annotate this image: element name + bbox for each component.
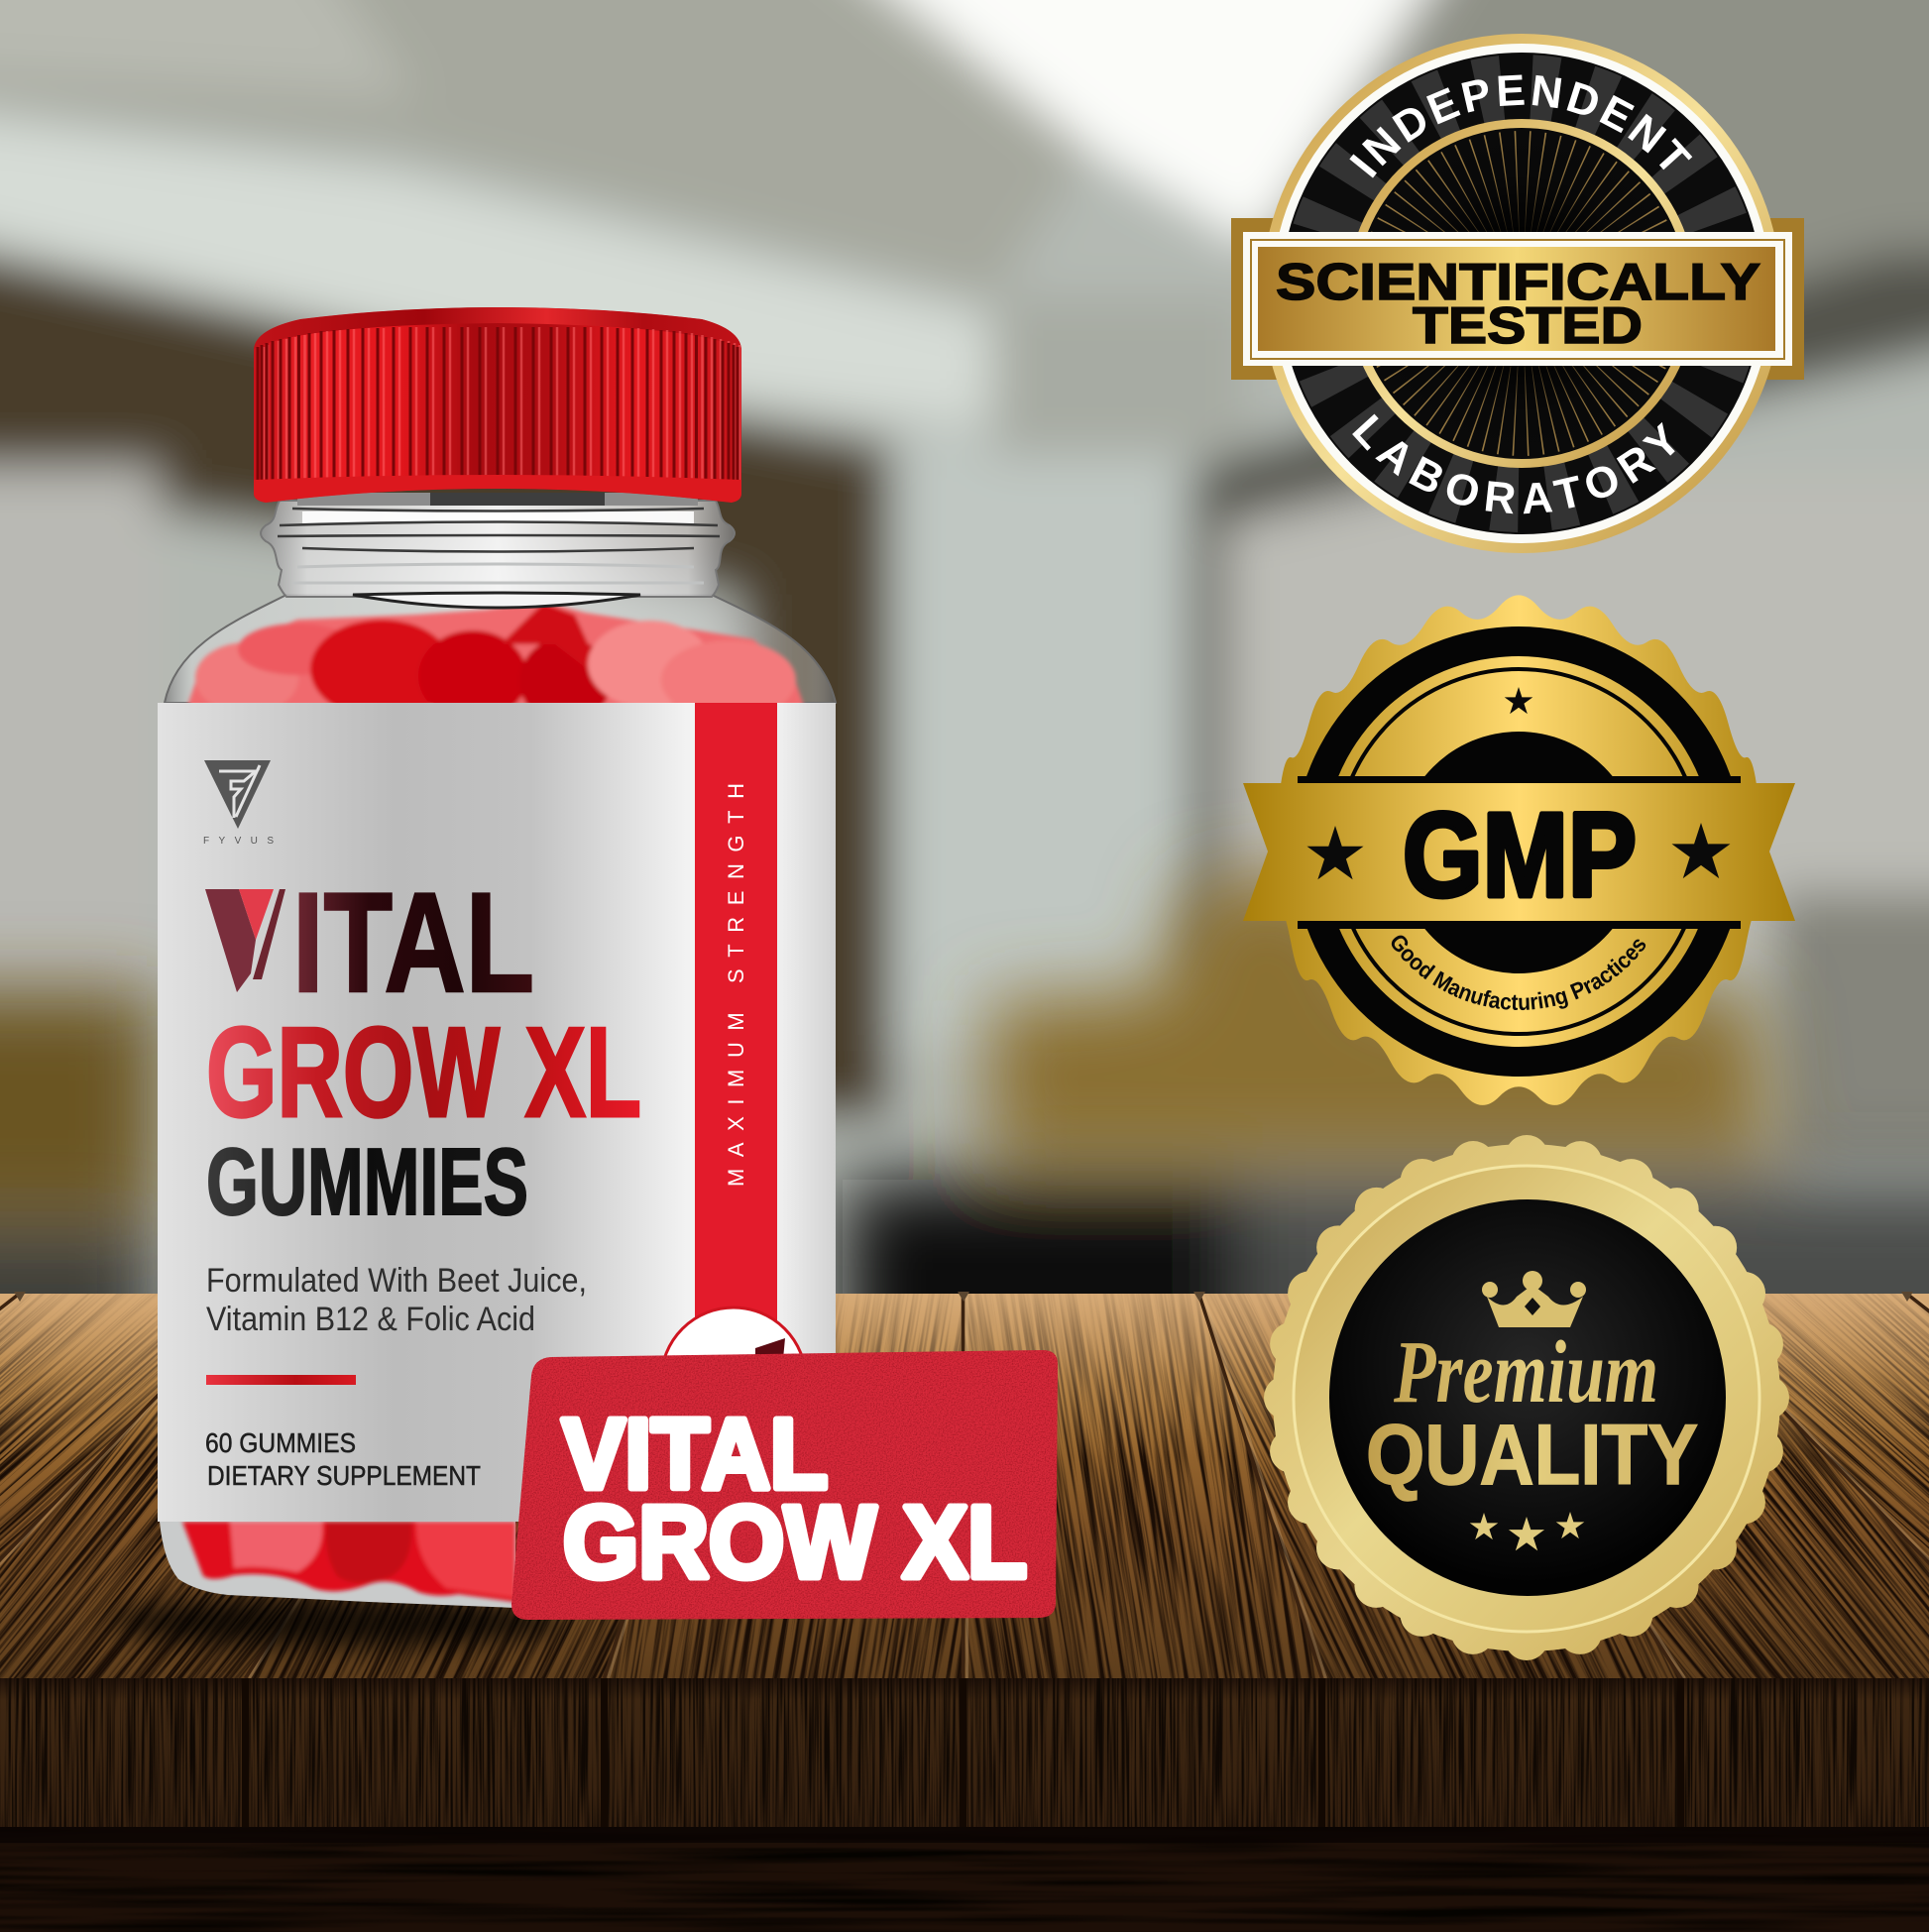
GMP letters: GMP [1403,787,1637,922]
table front edge [0,1678,1929,1827]
segmented ring [1315,87,1728,500]
tested banner [1243,232,1792,366]
product name: V mark [205,889,285,992]
brand logo: FYVUS [203,836,274,847]
red divider [206,1375,356,1385]
round seal partly hidden behind card [661,1307,806,1452]
badge: independent laboratory, scientifically tested [1231,34,1804,553]
brand logo [203,760,274,847]
gummies above label [185,606,806,703]
tested banner: SCIENTIFICALLY [1276,254,1760,311]
red name card [506,1343,1066,1626]
description line 2: Vitamin B12 & Folic Acid [206,1301,535,1338]
star top [1505,687,1532,714]
badge: GMP good manufacturing practices [1243,595,1795,1105]
scalloped seal [1273,595,1764,1105]
badge: premium quality [1273,1144,1780,1651]
scalloped seal [1273,1144,1780,1651]
star left [1306,826,1364,879]
product name: vital: ITAL [292,864,534,1022]
product bottle [158,302,836,1608]
card text: vital: VITAL [562,1399,828,1510]
curved text: good manufacturing practices [1389,942,1649,1010]
supplement line: DIETARY SUPPLEMENT [207,1460,481,1491]
badge: independent laboratory, scientifically tested: INDEPENDENT [1349,75,1693,178]
bottle shadow on table [109,1596,565,1648]
neck [261,501,735,597]
description line 1: Formulated With Beet Juice, [206,1262,587,1300]
badge: independent laboratory, scientifically tested: LABORATORY [1352,414,1675,513]
tested banner: TESTED [1413,297,1643,355]
card text: grow xl: GROW XL [563,1485,1027,1599]
red side stripe [695,703,777,1357]
background: blurred room interior [0,0,1929,1388]
back ribbon tabs [1231,218,1804,380]
table top: wooden planks [0,1292,1929,1678]
curved text: laboratory [1350,432,1685,513]
badge: GMP good manufacturing practices: Good Manufacturing Practices [1392,936,1645,1011]
table underside shadow [0,1827,1929,1932]
vertical text: maximum strength: MAXIMUM STRENGTH [724,783,748,1187]
gummies count: 60 GUMMIES [205,1427,356,1458]
product name: gummies: GUMMIES [206,1129,528,1235]
crown icon [1482,1271,1586,1327]
gold ribbon [1243,783,1795,921]
glass base [158,1517,515,1608]
product name: grow xl: GROW XL [206,1001,641,1144]
glass shoulder [165,595,836,703]
label [158,703,836,1522]
gold sunburst rays [1422,194,1621,393]
premium script: Premium [1393,1323,1658,1421]
three stars [1470,1512,1584,1550]
bottom gummies [182,1522,515,1602]
quality: QUALITY [1366,1408,1698,1503]
curved text: independent [1371,105,1670,180]
cap [248,302,748,506]
star right [1672,823,1730,878]
